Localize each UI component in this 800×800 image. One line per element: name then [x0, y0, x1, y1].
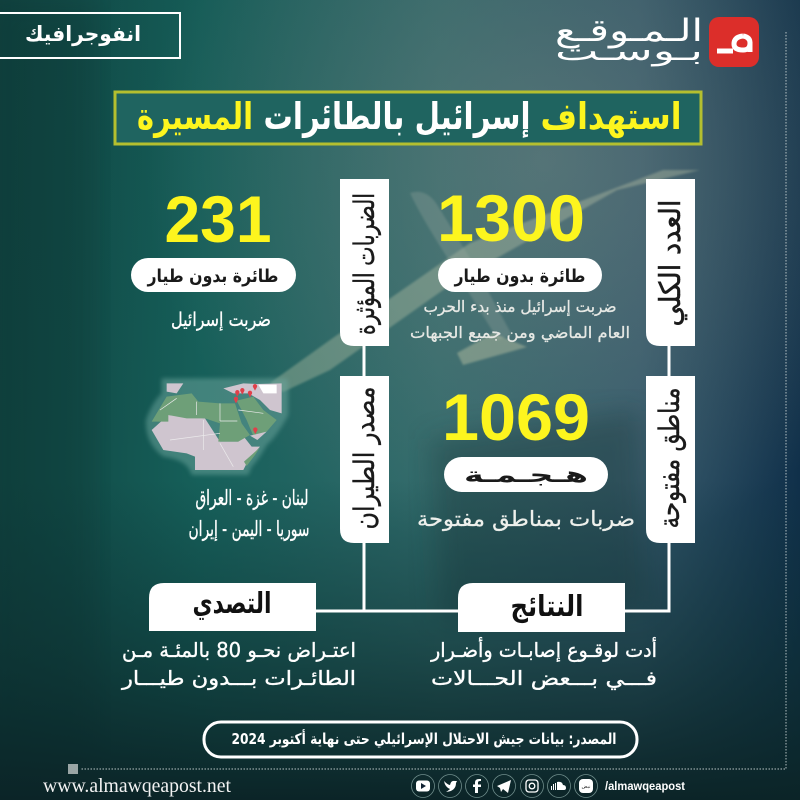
- countries: سوريا - اليمن - إيران: [188, 517, 310, 542]
- description: ضربت إسرائيل: [171, 309, 271, 332]
- box: results heading: [458, 583, 625, 632]
- tab: open areas: [646, 376, 695, 543]
- countries: لبنان - غزة - العراق: [196, 486, 308, 510]
- tab: effective strikes: الضربات المؤثرة: [348, 193, 381, 335]
- pill: drone: [131, 258, 296, 292]
- panel: effective strikes: [131, 179, 389, 346]
- icon: instagram: [526, 780, 538, 792]
- title: المسيرة: [137, 95, 253, 138]
- icon: nabd: نبض: [581, 784, 591, 790]
- icon: twitter: [444, 781, 457, 792]
- box: results heading: النتائج: [510, 589, 584, 623]
- source note: المصدر: بيانات جيش الاحتلال الإسرائيلي حتى نهاية أكتوبر 2024: [231, 729, 616, 748]
- icon: map pins: [234, 384, 257, 434]
- tab: source: مصدر الطيران: [348, 386, 381, 530]
- tab: effective strikes: [340, 179, 389, 346]
- box: interception heading: [149, 583, 316, 631]
- panel: open areas: [417, 376, 695, 543]
- logo: [555, 13, 759, 67]
- tag: infographic label: انفوجرافيك: [25, 22, 141, 46]
- number: 1069: 1069: [442, 380, 590, 454]
- description: ضربات بمناطق مفتوحة: [417, 507, 635, 531]
- social handle: /almawqeapost: [605, 779, 685, 793]
- description: العام الماضي ومن جميع الجبهات: [410, 323, 630, 343]
- description: [410, 297, 630, 343]
- logo wordmark: [555, 13, 703, 67]
- title: استهداف: [540, 95, 682, 138]
- tab: open areas: مناطق مفتوحة: [653, 388, 686, 528]
- panel: total number: [410, 179, 695, 346]
- icon: youtube: [416, 780, 430, 792]
- pill: drone: [438, 258, 602, 292]
- results text: [430, 637, 657, 691]
- pill: attack: [444, 457, 608, 492]
- results text: أدت لوقـوع إصابـات وأضـرار: [430, 637, 657, 663]
- panel: source of aircraft: [146, 376, 389, 543]
- connector lines: [316, 346, 669, 611]
- box: interception heading: التصدي: [192, 586, 272, 620]
- pill: drone: طائرة بدون طيار: [147, 266, 278, 287]
- title: إسرائيل بالطائرات: [264, 95, 530, 138]
- interception text: اعتـراض نحـو 80 بالمئـة مـن: [122, 638, 356, 662]
- icon: facebook: [473, 779, 481, 793]
- number: 231: 231: [164, 182, 272, 256]
- icon: soundcloud: [551, 782, 566, 790]
- panel: results: [430, 583, 657, 691]
- pill: attack: هـجـمـة: [464, 463, 588, 487]
- countries: [188, 486, 310, 542]
- results text: فـــي بـــعض الحـــالات: [431, 666, 657, 691]
- pill: drone: طائرة بدون طيار: [454, 266, 586, 287]
- title: [115, 92, 701, 144]
- tag: infographic label: [0, 13, 180, 58]
- tab: source: [340, 376, 389, 543]
- social icons: [412, 774, 685, 798]
- logo wordmark: الـمـوقـع: [555, 13, 703, 49]
- map: arab world: [146, 378, 288, 475]
- icon: nabd: [579, 779, 593, 793]
- icon: telegram: [497, 780, 511, 793]
- panel: interception: [121, 583, 356, 690]
- number: 1300: 1300: [437, 181, 585, 255]
- logo wordmark: بـوسـت: [555, 36, 703, 67]
- website url: www.almawqeapost.net: [43, 775, 231, 797]
- description: ضربت إسرائيل منذ بدء الحرب: [424, 297, 616, 317]
- tab: total: [646, 179, 695, 346]
- icon: logo mark: [709, 17, 759, 67]
- tab: total: العدد الكلي: [653, 200, 688, 326]
- source note: [204, 722, 637, 757]
- interception text: [121, 638, 356, 690]
- interception text: الطائـرات بـــدون طيـــار: [121, 666, 356, 690]
